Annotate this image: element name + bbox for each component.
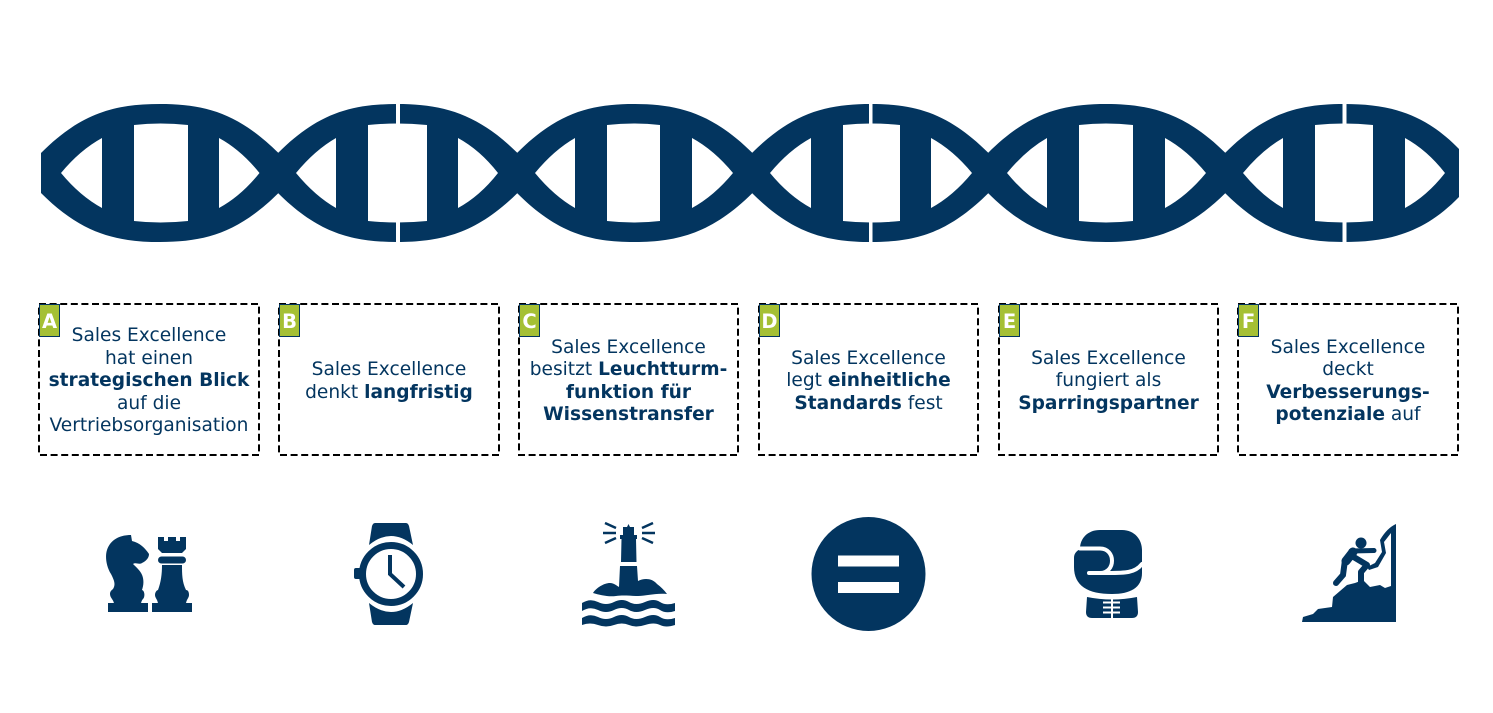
icon: lighthouse <box>582 522 675 626</box>
panel: F <box>1237 303 1459 456</box>
text F: potenziale auf <box>1275 404 1421 425</box>
text F: Verbesserungs- <box>1266 382 1430 402</box>
text C: Wissenstransfer <box>543 404 714 425</box>
badge F <box>1238 304 1259 337</box>
icon: boxing glove <box>1074 530 1142 618</box>
panel: A <box>38 303 260 456</box>
badge B: B <box>282 310 297 333</box>
text D: legt einheitliche <box>786 370 951 391</box>
badge C <box>519 304 540 337</box>
badge C: C <box>522 310 537 333</box>
panel: C <box>518 303 739 456</box>
badge D: D <box>761 310 778 333</box>
icon: equals sign in circle <box>812 517 926 631</box>
badge A: A <box>42 310 57 333</box>
text F: Sales Excellence <box>1271 336 1425 358</box>
text E: Sparringspartner <box>1018 393 1199 414</box>
text A: hat einen <box>105 348 193 369</box>
text E: fungiert als <box>1056 370 1161 391</box>
text F: deckt <box>1322 359 1374 380</box>
text A: Sales Excellence <box>72 325 226 346</box>
text B <box>305 359 473 402</box>
badge E: E <box>1003 310 1016 333</box>
text E <box>1018 348 1199 414</box>
DNA helix <box>41 104 1459 242</box>
badge E <box>999 304 1020 337</box>
text F <box>1266 336 1430 425</box>
panel: D <box>758 303 979 456</box>
text C <box>530 336 727 425</box>
icon: wristwatch <box>354 523 423 625</box>
badge F: F <box>1242 310 1255 333</box>
badge D <box>759 304 780 337</box>
text D: Sales Excellence <box>791 348 946 369</box>
text D: Standards fest <box>794 393 943 414</box>
text B: Sales Excellence <box>312 359 466 380</box>
text D <box>786 348 951 414</box>
text B: denkt langfristig <box>305 382 473 402</box>
badge A <box>39 304 60 337</box>
text A <box>49 325 250 436</box>
text E: Sales Excellence <box>1031 348 1186 369</box>
text C: funktion für <box>566 382 691 402</box>
text A: Vertriebsorganisation <box>50 415 248 436</box>
text A: strategischen Blick <box>49 370 249 391</box>
text C: Sales Excellence <box>551 336 706 358</box>
icon: chess knight and rook <box>106 535 192 612</box>
icon: mountain climber <box>1302 524 1396 622</box>
panel: B <box>278 303 500 456</box>
text A: auf die <box>117 393 181 414</box>
badge B <box>279 304 300 337</box>
text C: besitzt Leuchtturm- <box>530 359 727 380</box>
panel: E <box>998 303 1219 456</box>
